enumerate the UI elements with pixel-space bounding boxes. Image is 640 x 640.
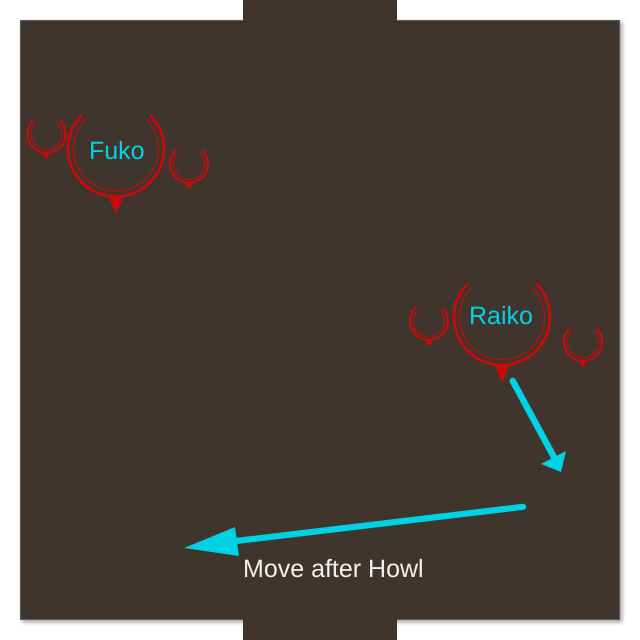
- marker: Fuko right companion: [170, 150, 208, 190]
- marker: Raiko right companion: [564, 329, 602, 368]
- label: Raiko: Raiko: [469, 302, 533, 330]
- arrow: Raiko moves down-right: [513, 381, 566, 472]
- marker: Fuko: [68, 115, 164, 213]
- caption: Move after Howl: Move after Howl: [243, 555, 424, 583]
- marker: Raiko left companion: [410, 308, 448, 346]
- marker: Fuko left companion: [28, 120, 66, 159]
- arrow: move left after howl: [184, 507, 523, 556]
- label: Fuko: Fuko: [89, 137, 145, 165]
- marker: Raiko: [454, 284, 550, 382]
